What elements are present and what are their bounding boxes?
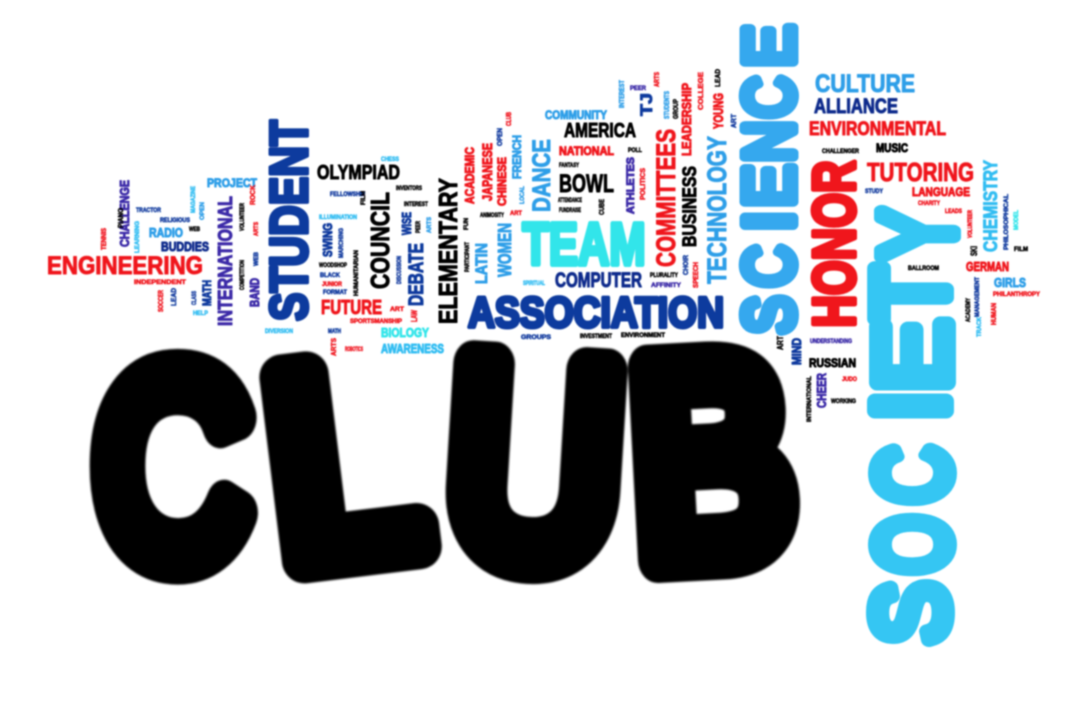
medium vertical words: INTERNATIONAL (215, 196, 237, 326)
medium horizontal words: MUSIC (876, 141, 908, 155)
tiny filler words: WORKING (831, 399, 856, 405)
tiny filler words: FORMAT (323, 290, 347, 296)
medium vertical words: ACADEMIC (462, 147, 477, 204)
tiny filler words: MANAGEMENT (975, 277, 981, 317)
medium horizontal words: COMMUNITY (545, 108, 607, 122)
medium horizontal words: AMERICA (564, 120, 636, 142)
medium vertical words: DANCE (528, 139, 556, 212)
medium vertical words: BUSINESS (680, 166, 701, 247)
tiny filler words: STUDENTS (664, 91, 671, 119)
word: SCIENCE: C (730, 246, 808, 287)
word: SOCIETY: E (855, 320, 970, 391)
tiny filler words: ANIMOSITY (480, 213, 504, 219)
medium horizontal words: CULTURE (815, 70, 915, 98)
tiny filler words: LEARNING (135, 221, 141, 253)
tiny filler words: COLLEGE (698, 72, 705, 110)
word: HONOR: HONOR (802, 160, 868, 328)
tiny filler words: FILM (361, 191, 367, 205)
medium horizontal words: PROJECT (207, 176, 258, 190)
tiny filler words: CHALLENGER (822, 149, 860, 155)
word: SCIENCE: S (730, 296, 808, 334)
tiny filler words: WEB (189, 227, 201, 233)
word: CLUB: C (97, 316, 248, 616)
tiny filler words: VOLUNTEER (240, 203, 246, 231)
medium vertical words: CHEMISTRY (981, 160, 1002, 252)
medium vertical words: ELEMENTARY (433, 178, 463, 324)
medium horizontal words (47, 70, 1026, 370)
tiny filler words: WOODSHOP (319, 263, 347, 269)
tiny filler words: SPEECH (693, 262, 700, 288)
medium vertical words: JAPANESE (479, 143, 495, 201)
medium vertical words: BAND (247, 278, 262, 307)
tiny filler words: INVESTMENT (580, 334, 612, 340)
word: SCIENCE: I (730, 211, 808, 231)
word: SOCIETY: T (853, 266, 968, 321)
tiny filler words: JUDO (842, 377, 857, 383)
tiny filler words: MODEL (1014, 210, 1020, 230)
tiny filler words: SPIRITUAL (523, 281, 545, 287)
medium vertical words: CHINESE (495, 157, 509, 206)
medium vertical words: SWING (320, 223, 335, 257)
medium vertical words: TECHNOLOGY (702, 136, 732, 284)
word: SOCIETY: S (853, 582, 968, 644)
medium vertical words (117, 83, 1002, 408)
medium vertical words: COUNCIL (365, 192, 395, 289)
medium horizontal words: ENGINEERING (47, 252, 203, 280)
tiny filler words: DISCUSSION (397, 256, 403, 284)
word: SOCIETY (853, 209, 975, 644)
medium vertical words: TJ (637, 93, 656, 116)
tiny filler words: FELLOWSHIP (330, 192, 365, 198)
tiny filler words: LEAD (171, 288, 178, 306)
tiny filler words: PIANO (118, 208, 125, 228)
medium horizontal words: COMPUTER (555, 269, 642, 292)
tiny filler words: POLITICS (640, 168, 647, 200)
tiny filler words: ARTS (331, 338, 338, 356)
medium horizontal words: TUTORING (867, 157, 974, 187)
medium vertical words: YOUNG (710, 93, 726, 129)
tiny filler words: CHOIR (683, 255, 690, 275)
tiny filler words: ART (731, 113, 738, 128)
tiny filler words: STUDY (865, 189, 883, 195)
word: CLUB: B (625, 301, 799, 621)
tiny filler words: ATTENDANCE (558, 198, 582, 204)
word: SCIENCE: C (730, 76, 808, 118)
word: TEAM: TEAM (522, 212, 646, 278)
tiny filler words: HELP (193, 311, 208, 317)
tiny filler words: CHESS (381, 157, 399, 163)
word: SCIENCE (730, 25, 808, 334)
tiny filler words (101, 69, 1040, 422)
tiny filler words: CUBE (599, 199, 606, 215)
medium horizontal words: AWARENESS (381, 341, 444, 356)
medium horizontal words: RADIO (149, 225, 183, 240)
medium horizontal words: BUDDIES (161, 239, 209, 254)
tiny filler words: ILLUMINATION (319, 215, 357, 221)
word: CLUB (97, 301, 799, 622)
tiny filler words: FILM (1014, 247, 1028, 253)
tiny filler words: HUMAN (991, 303, 998, 325)
tiny filler words: INVENTORS (396, 186, 422, 192)
medium horizontal words: NATIONAL (559, 144, 614, 158)
tiny filler words: INTERNATIONAL (807, 376, 813, 422)
medium vertical words: LATIN (472, 243, 491, 284)
medium vertical words: WOMEN (495, 223, 515, 277)
tiny filler words: SOCCER (158, 290, 165, 312)
tiny filler words: RELIGIOUS (160, 218, 190, 224)
tiny filler words: SPORTSMANSHIP (350, 319, 402, 325)
tiny filler words: CLASS (192, 291, 198, 305)
tiny filler words: COMPETITION (240, 260, 246, 290)
word: SOCIETY: Y (860, 209, 975, 259)
tiny filler words: ART (510, 211, 522, 217)
word: ASSOCIATION: ASSOCIATION (468, 289, 724, 337)
medium horizontal words: GIRLS (994, 275, 1026, 290)
tiny filler words: GROUP (673, 99, 680, 119)
medium horizontal words: ENVIRONMENTAL (809, 119, 946, 140)
tiny filler words: POLL (628, 148, 642, 154)
tiny filler words: ART (390, 307, 404, 313)
medium vertical words: MATH (200, 280, 214, 306)
tiny filler words: PHILANTHROPY (993, 292, 1040, 298)
tiny filler words: LEAD (715, 69, 722, 87)
word: STUDENT: STUDENT (260, 120, 319, 321)
tiny filler words: ARTS (427, 217, 433, 233)
tiny filler words: LAW (410, 310, 419, 322)
medium vertical words: ATHLETES (625, 157, 637, 214)
tiny filler words: FANTASY (559, 163, 579, 169)
medium vertical words: CHALLENGE (117, 180, 132, 247)
tiny filler words: BALLROOM (908, 266, 939, 272)
tiny filler words: ARTS (254, 222, 260, 236)
word: CLUB: U (439, 301, 630, 622)
word: SOCIETY: O (855, 515, 970, 574)
tiny filler words: FUN (464, 218, 470, 230)
tiny filler words: VOLUNTEER (968, 210, 974, 238)
medium vertical words: LEADERSHIP (679, 83, 694, 156)
tiny filler words: MATH (328, 329, 341, 335)
tiny filler words: MARCHING (339, 228, 345, 258)
medium horizontal words: LANGUAGE (912, 185, 970, 199)
medium horizontal words: BOWL (559, 170, 614, 198)
tiny filler words: INDEPENDENT (134, 280, 186, 286)
word: SCIENCE: N (730, 121, 808, 162)
medium horizontal words: BIOLOGY (381, 325, 429, 340)
tiny filler words: FUNDRAISE (559, 208, 581, 214)
tiny filler words: OPEN (200, 202, 206, 220)
tiny filler words: PARTICIPANT (465, 242, 471, 272)
medium vertical words: FRENCH (510, 135, 524, 179)
tiny filler words: TRACK (977, 316, 983, 337)
tiny filler words: TRACTOR (136, 208, 162, 214)
tiny filler words: SKI (969, 246, 979, 256)
tiny filler words: ENVIRONMENT (621, 333, 665, 339)
tiny filler words: CHARITY (918, 201, 940, 207)
tiny filler words: PEER (630, 86, 647, 92)
word: SCIENCE: E (730, 25, 808, 67)
tiny filler words: WEB (254, 251, 260, 266)
medium horizontal words: GERMAN (966, 259, 1009, 274)
tiny filler words: UNDERSTANDING (810, 339, 852, 345)
tiny filler words: OPEN (497, 128, 504, 146)
tiny filler words: ROCK (250, 185, 257, 205)
tiny filler words: MAGAZINE (191, 186, 197, 213)
tiny filler words: CLUB (506, 112, 513, 126)
tiny filler words: AFFINITY (651, 283, 681, 289)
tiny filler words: JUNIOR (322, 282, 343, 288)
tiny filler words: HUMANITARIAN (354, 250, 360, 296)
tiny filler words: BLACK (320, 273, 341, 279)
medium horizontal words: RUSSIAN (809, 356, 856, 370)
word: SOCIETY: C (855, 446, 970, 504)
tiny filler words: LOCAL (520, 186, 526, 204)
medium vertical words: WISE (399, 212, 414, 235)
tiny filler words: PHILOSOPHICAL (1004, 194, 1010, 250)
tiny filler words: INTEREST (619, 79, 626, 108)
medium horizontal words: FUTURE (321, 297, 382, 319)
tiny filler words: ACADEMY (966, 298, 972, 322)
tiny filler words: ARTS (654, 72, 661, 87)
medium vertical words: COMMITTEES (651, 129, 681, 267)
tiny filler words: INTEREST (404, 202, 428, 208)
word: SCIENCE: E (730, 165, 808, 207)
word: CLUB: L (253, 304, 435, 620)
tiny filler words: LEADS (945, 209, 962, 215)
tiny filler words: GROUPS (521, 335, 551, 341)
tiny filler words: TENNIS (101, 228, 108, 250)
medium vertical words: MIND (789, 338, 804, 365)
medium horizontal words: ALLIANCE (814, 95, 898, 118)
medium vertical words: CHEER (814, 373, 829, 408)
tiny filler words: DIVERSION (265, 329, 293, 335)
tiny filler words: PLURALITY (650, 273, 678, 279)
tiny filler words: PEER (416, 221, 422, 233)
tiny filler words: ROBOTICS (345, 347, 363, 353)
word: SOCIETY: I (853, 392, 968, 420)
medium vertical words: DEBATE (405, 243, 428, 306)
medium horizontal words: OLYMPIAD (317, 162, 400, 184)
tiny filler words: ART (776, 336, 785, 350)
